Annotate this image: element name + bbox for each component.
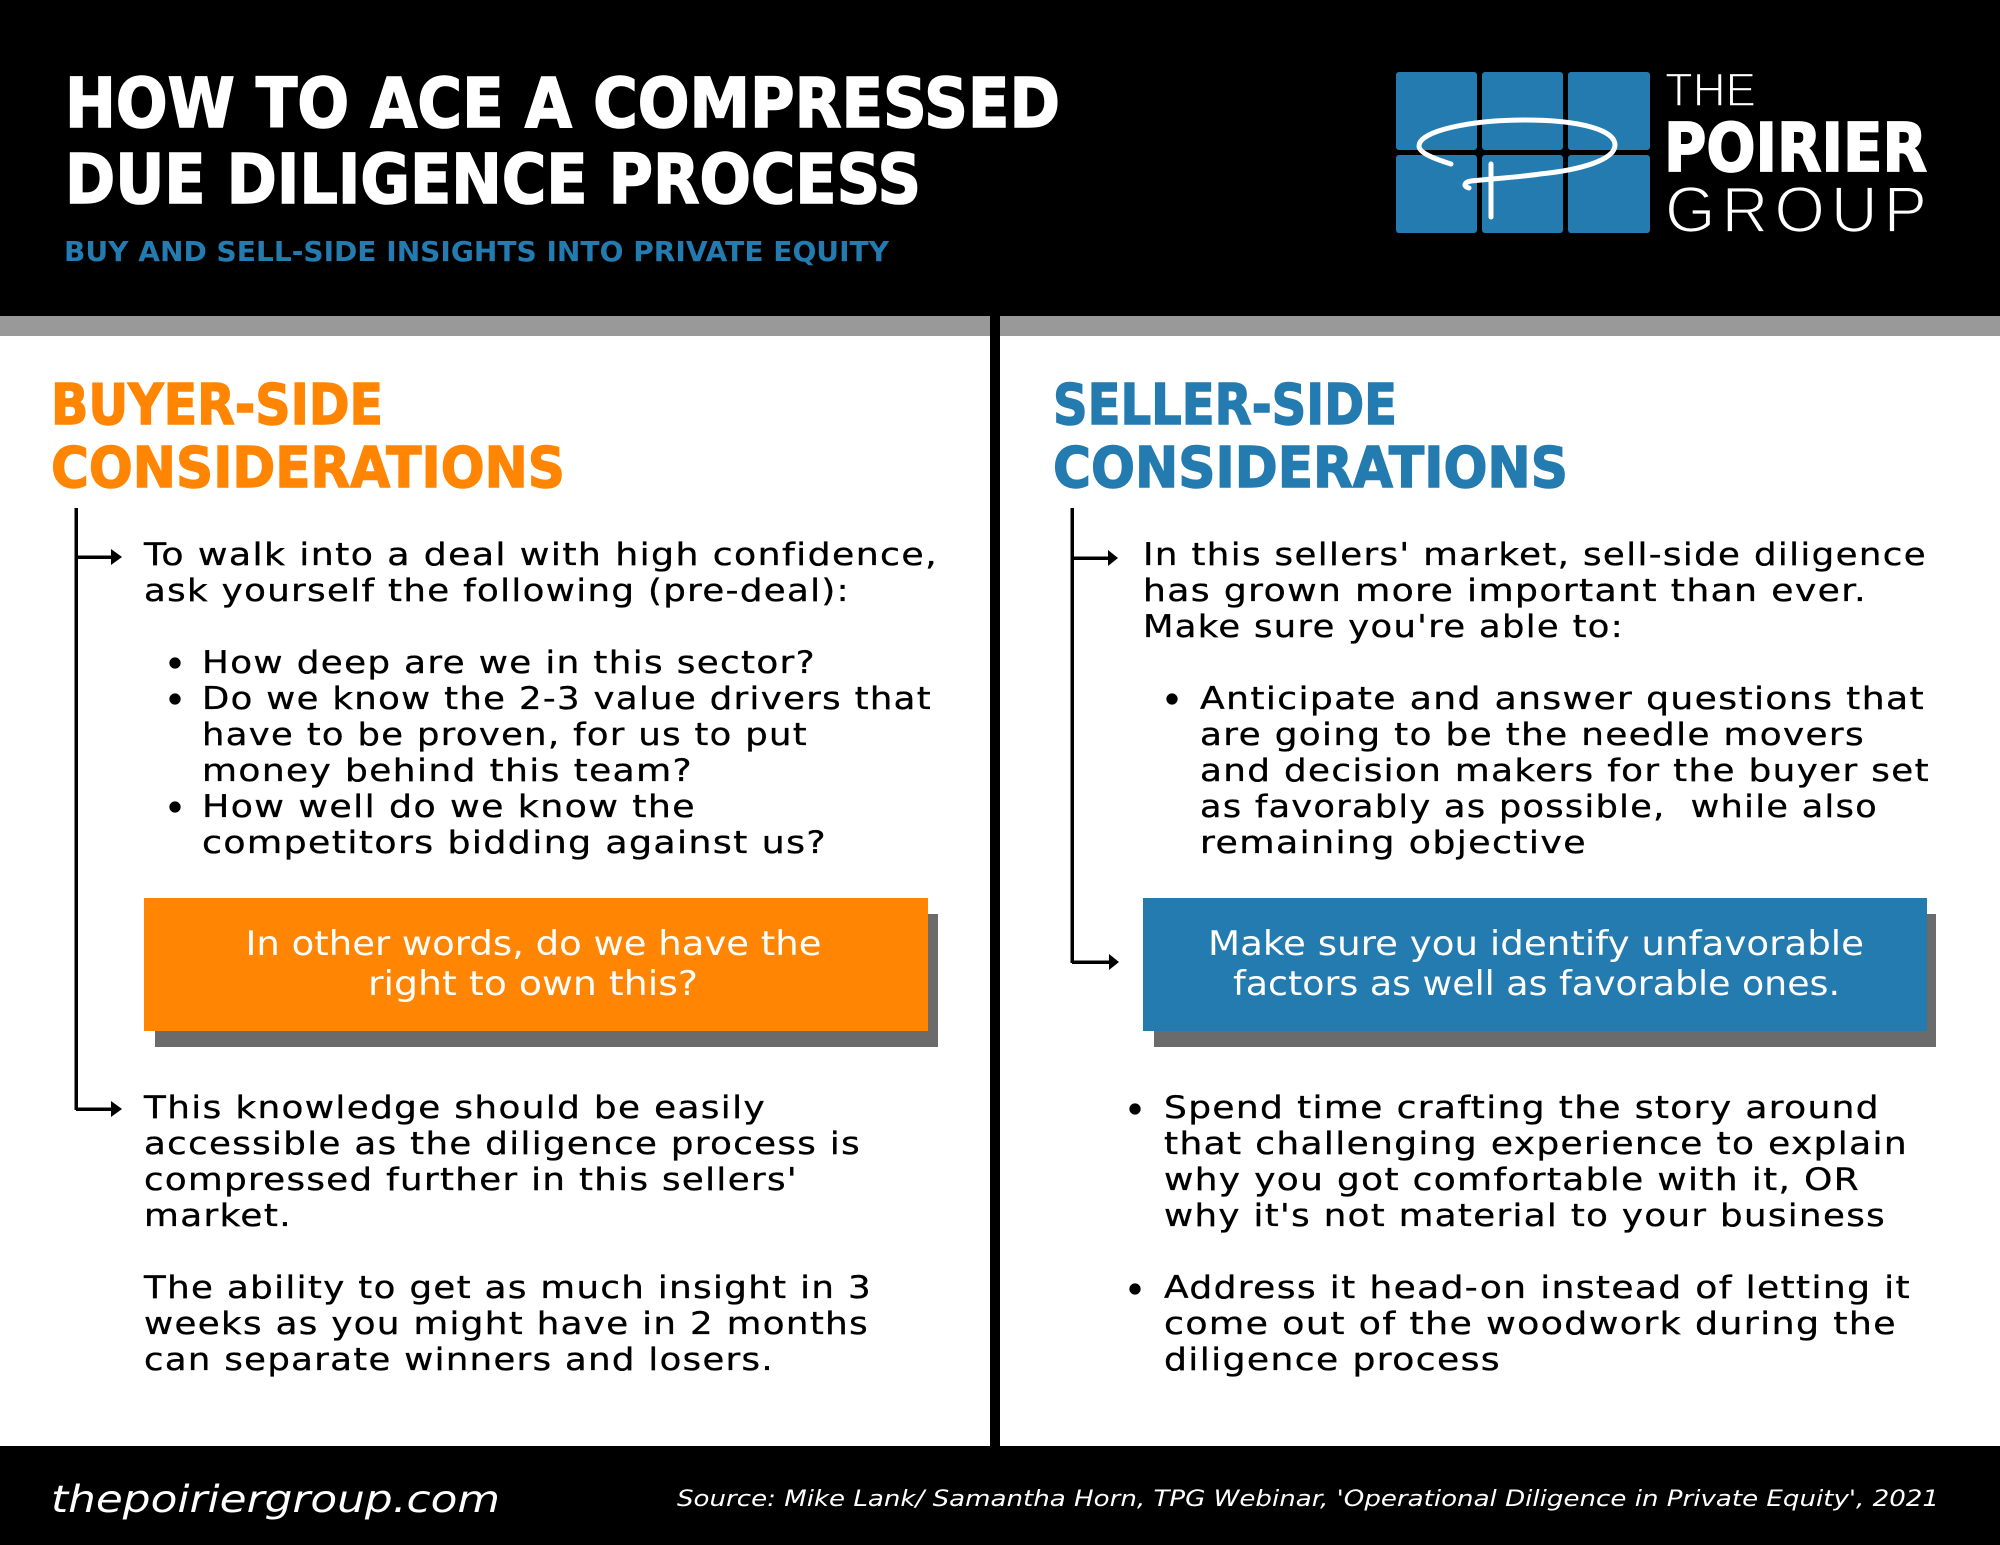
footer source: Source: Mike Lank/ Samantha Horn, TPG Webinar, 'Operational Diligence in Private Equity', 2021 — [677, 1487, 1939, 1512]
list: seller anticipate: and decision makers for the buyer set — [1200, 753, 1930, 789]
heading: buyer-side considerations — [51, 373, 565, 501]
list: buyer questions: How well do we know the — [202, 789, 696, 825]
text: buyer intro — [143, 537, 938, 609]
text: buyer ability: The ability to get as much insight in 3 — [143, 1270, 872, 1306]
text: buyer knowledge: This knowledge should be easily — [143, 1090, 766, 1126]
list: buyer questions — [170, 645, 932, 861]
callout: buyer — [144, 898, 938, 1047]
list: buyer questions: have to be proven, for us to put — [202, 717, 808, 753]
text: seller intro: has grown more important than ever. — [1143, 573, 1867, 609]
list: seller story — [1130, 1090, 1908, 1234]
header band — [0, 0, 2000, 316]
list: seller address: Address it head-on instead of letting it — [1164, 1270, 1911, 1306]
subtitle: BUY AND SELL-SIDE INSIGHTS INTO PRIVATE EQUITY — [64, 235, 890, 268]
title — [65, 64, 1060, 220]
arrow: buyer connector — [74, 508, 122, 1117]
arrow: seller connector — [1070, 508, 1119, 970]
list: seller story: why it's not material to your business — [1164, 1198, 1886, 1234]
callout: seller: Make sure you identify unfavorable — [1208, 924, 1864, 964]
list: seller anticipate — [1166, 681, 1930, 861]
text: buyer knowledge: compressed further in this sellers' — [144, 1162, 798, 1198]
list: seller address: diligence process — [1164, 1342, 1501, 1378]
logo wordmark: THE — [1665, 63, 1756, 116]
text: seller intro: Make sure you're able to: — [1143, 609, 1624, 645]
logo wordmark: POIRIER — [1664, 109, 1927, 187]
text: seller intro: In this sellers' market, sell-side diligence — [1143, 537, 1927, 573]
list: seller anticipate: remaining objective — [1200, 825, 1587, 861]
text: buyer knowledge — [143, 1090, 861, 1234]
logo — [1396, 63, 1927, 246]
heading: seller-side considerations: CONSIDERATIONS — [1053, 436, 1568, 501]
text: buyer ability: can separate winners and losers. — [144, 1342, 774, 1378]
list: seller anticipate: as favorably as possible, while also — [1200, 789, 1878, 825]
callout: buyer: right to own this? — [368, 964, 698, 1004]
heading: seller-side considerations — [1053, 373, 1568, 501]
list: seller story: Spend time crafting the story around — [1164, 1090, 1880, 1126]
panel: seller side — [1000, 316, 2000, 1446]
footer url: thepoiriergroup.com — [51, 1478, 500, 1521]
text: buyer ability: weeks as you might have in 2 months — [144, 1306, 869, 1342]
list: seller story: why you got comfortable with it, OR — [1164, 1162, 1860, 1198]
footer — [0, 1446, 2000, 1545]
callout: seller: factors as well as favorable ones. — [1233, 964, 1840, 1004]
list: seller address: come out of the woodwork during the — [1164, 1306, 1897, 1342]
list: buyer questions: competitors bidding against us? — [202, 825, 827, 861]
heading: buyer-side considerations: BUYER-SIDE — [51, 373, 383, 438]
text: buyer knowledge: accessible as the diligence process is — [144, 1126, 861, 1162]
logo wordmark — [1664, 63, 1927, 246]
heading: seller-side considerations: SELLER-SIDE — [1053, 373, 1397, 438]
logo wordmark: GROUP — [1665, 173, 1927, 246]
list: seller story: that challenging experience to explain — [1164, 1126, 1908, 1162]
title: DUE DILIGENCE PROCESS — [65, 140, 921, 220]
callout: seller — [1143, 898, 1936, 1047]
text: seller intro — [1143, 537, 1927, 645]
list: seller anticipate: are going to be the needle movers — [1200, 717, 1865, 753]
text: buyer ability — [143, 1270, 872, 1378]
list: buyer questions: money behind this team? — [202, 753, 693, 789]
list: buyer questions: Do we know the 2-3 value drivers that — [202, 681, 932, 717]
list: seller anticipate: Anticipate and answer questions that — [1200, 681, 1925, 717]
logo mark — [1396, 72, 1650, 233]
text: buyer intro: To walk into a deal with high confidence, — [143, 537, 938, 573]
text: buyer intro: ask yourself the following (pre-deal): — [144, 573, 850, 609]
list: buyer questions: How deep are we in this sector? — [202, 645, 816, 681]
panel: buyer side — [0, 316, 990, 1446]
title: HOW TO ACE A COMPRESSED — [65, 64, 1060, 144]
list: seller address — [1130, 1270, 1911, 1378]
heading: buyer-side considerations: CONSIDERATIONS — [51, 436, 565, 501]
text: buyer knowledge: market. — [144, 1198, 292, 1234]
callout: buyer: In other words, do we have the — [246, 924, 822, 964]
